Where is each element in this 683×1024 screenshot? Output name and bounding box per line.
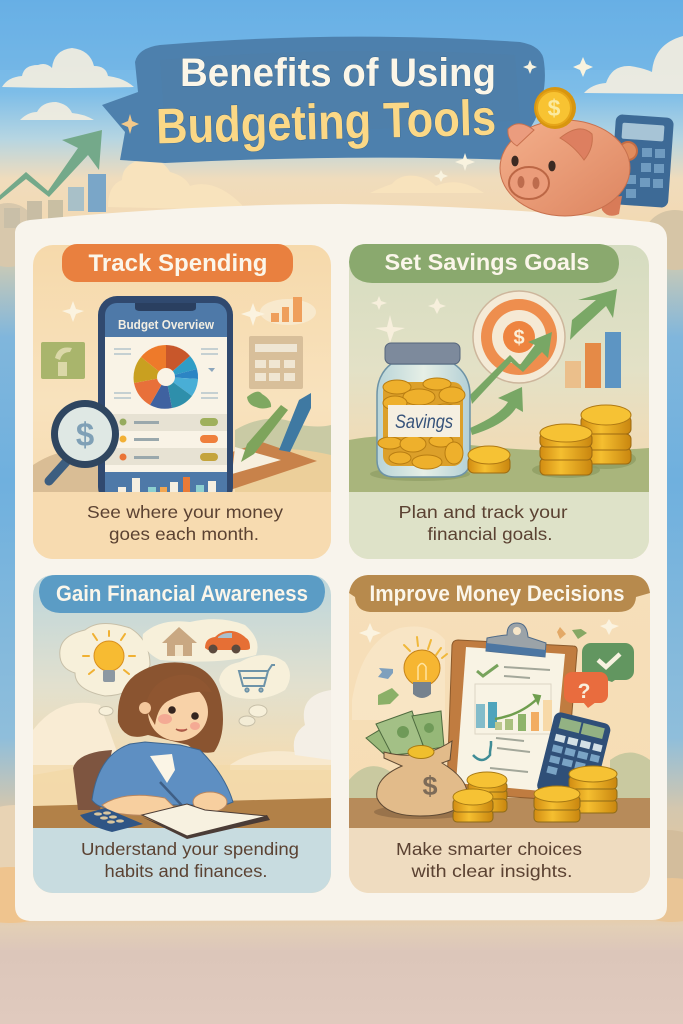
icon: cash (366, 711, 444, 755)
jar label (388, 405, 460, 437)
icon: jar with coins (370, 343, 470, 481)
background cloud and shrubs (352, 626, 445, 720)
title banner (102, 37, 545, 163)
background clouds (33, 690, 331, 775)
caption: Understand your spending (81, 839, 299, 859)
caption: Plan and track your (398, 502, 568, 522)
panel: improve money decisions: with clear insights. (410, 861, 572, 881)
caption: Make smarter choices (396, 839, 582, 859)
pill: gain financial awareness (39, 575, 325, 613)
notebook (142, 804, 270, 839)
pill: track spending: Track Spending (88, 250, 268, 277)
icon: magnifying glass (49, 400, 119, 481)
bars (565, 332, 621, 388)
icon: short coin stack (532, 424, 600, 478)
icon: calculator (249, 336, 303, 389)
panel: gain financial awareness (33, 575, 331, 893)
icon: lightbulb (83, 631, 135, 682)
chair (73, 750, 112, 810)
icon: jar with coins: Savings (395, 412, 453, 433)
icon: target (473, 291, 565, 383)
icon: single coin stack (468, 446, 510, 473)
pill: improve money decisions: Improve Money Decisions (370, 581, 624, 606)
pencil (241, 405, 288, 462)
title line 1: Benefits of Using (180, 51, 496, 95)
big arrow (570, 289, 617, 340)
warm clouds on the horizon (108, 159, 484, 210)
clipboard chart (475, 684, 552, 734)
clipboard with paper (230, 442, 317, 490)
hands (102, 795, 175, 815)
pill: improve money decisions (349, 575, 650, 612)
icon: cart (239, 665, 275, 692)
torso (92, 742, 233, 808)
pen (279, 393, 311, 452)
icon: coin stacks left (453, 772, 507, 822)
desk (33, 798, 331, 828)
clipboard clip (486, 623, 546, 657)
phone heading: Budget Overview (118, 318, 214, 332)
small bar chart (260, 297, 316, 325)
sparkles around title (121, 57, 593, 182)
small leaf shapes (378, 627, 587, 705)
sparkles (359, 619, 619, 643)
caption band, track spending: goes each month. (109, 524, 259, 544)
woman (92, 662, 233, 815)
speech bubble: question (564, 672, 608, 708)
icon: car (205, 631, 250, 654)
panel: set savings goals: financial goals. (428, 524, 552, 544)
ground (349, 436, 649, 492)
head (148, 683, 208, 741)
sparkles (62, 301, 265, 326)
caption band (349, 828, 650, 893)
phone list rows (105, 414, 227, 465)
leaf (247, 392, 271, 408)
icon: piggy bank with coin: $ (548, 95, 561, 121)
calculator on desk (80, 808, 143, 832)
icon: piggy bank with coin (500, 87, 637, 216)
pill: track spending (62, 244, 293, 282)
table (349, 798, 650, 828)
pie chart (134, 345, 198, 409)
growth chart with arrow (0, 130, 106, 228)
icon: lightbulb (404, 637, 447, 698)
thought bubble: cart (219, 655, 290, 726)
panel: improve money decisions (349, 575, 650, 893)
icon: calculator (536, 711, 612, 805)
icon: tall coin stack (576, 405, 636, 469)
caption band, track spending (33, 492, 331, 559)
arrows from jar (470, 332, 552, 404)
icon: money bag: $ (422, 771, 438, 801)
speech bubble: question: ? (578, 680, 590, 703)
caption band (33, 828, 331, 893)
pill: gain financial awareness: Gain Financial Awareness (56, 581, 308, 606)
caption: See where your money (87, 502, 283, 522)
main card (15, 204, 667, 921)
panel: set savings goals (349, 245, 649, 559)
icon: clipboard (447, 623, 577, 800)
icon: magnifying glass: $ (76, 416, 94, 453)
speech bubble: check (582, 643, 634, 682)
title line 2: Budgeting Tools (155, 90, 497, 154)
clouds in the sky (2, 36, 683, 120)
thought bubble: lightbulb (60, 623, 150, 716)
scene hills (33, 454, 99, 492)
icon: calculator behind piggy bank (610, 114, 674, 208)
pill: set savings goals: Set Savings Goals (384, 249, 590, 275)
thought bubble: house and car (143, 619, 258, 662)
caption band (349, 492, 649, 559)
icon: coin stacks right (534, 766, 617, 822)
panel: track spending (33, 245, 331, 559)
sparkles (371, 296, 446, 343)
panel: gain financial awareness: habits and finances. (104, 861, 268, 881)
pill: set savings goals (349, 244, 619, 283)
icon: phone (98, 296, 233, 506)
icon: target: $ (513, 327, 525, 349)
phone mini bars (118, 477, 216, 493)
icon: green wallet (41, 342, 85, 379)
phone side lines (114, 349, 218, 398)
icon: house (162, 627, 197, 656)
icon: money bag (374, 741, 470, 819)
